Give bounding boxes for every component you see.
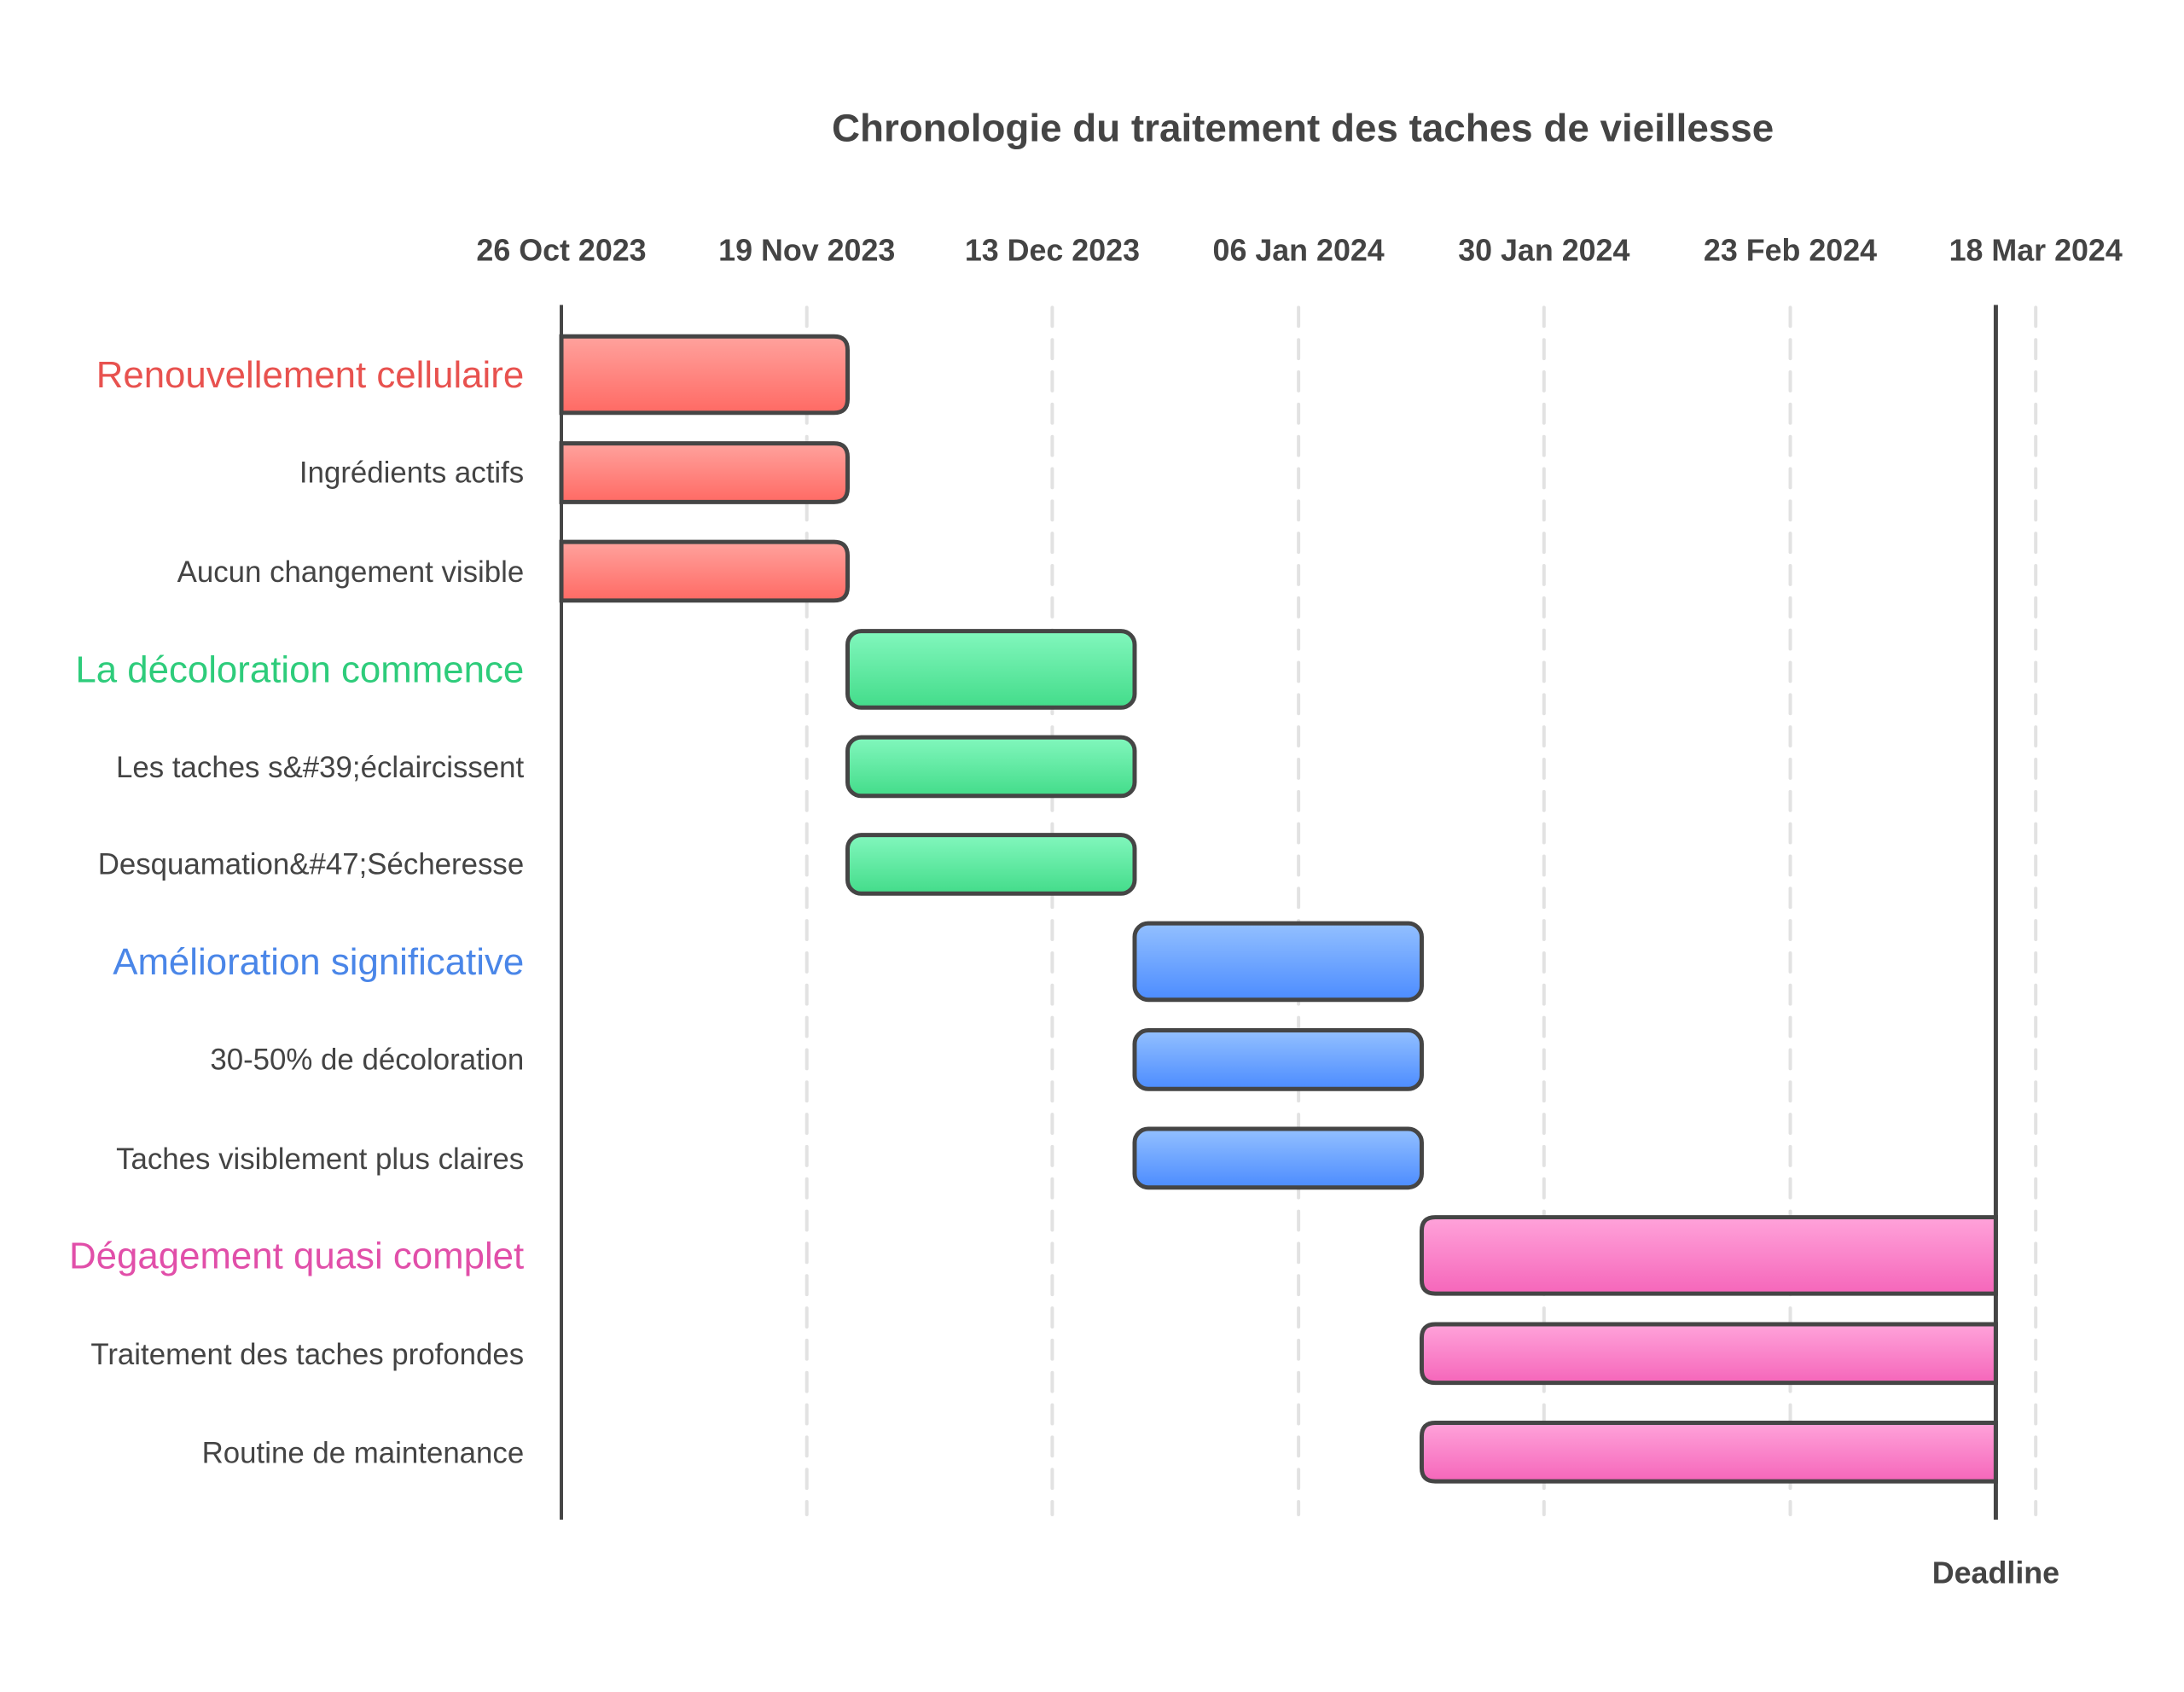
- row labels: Renouvellement cellulaire: [96, 354, 524, 396]
- axis date labels: [476, 234, 2123, 268]
- axis date labels: 06 Jan 2024: [1213, 234, 1385, 268]
- bar: Routine de maintenance: [1421, 1422, 1995, 1481]
- bar: 30-50%: [1135, 1031, 1421, 1089]
- bar: La décoloration commence: [848, 631, 1135, 707]
- row labels: Amélioration significative: [113, 941, 524, 983]
- axis date labels: 30 Jan 2024: [1458, 234, 1629, 268]
- start axis line: [560, 305, 563, 1520]
- bar: Les taches s'éclaircissent: [848, 737, 1135, 796]
- axis date labels: 18 Mar 2024: [1949, 234, 2123, 268]
- axis date labels: 26 Oct 2023: [476, 234, 647, 268]
- deadline line: [1994, 305, 1998, 1520]
- bar: Dégagement quasi complet: [1421, 1218, 1995, 1294]
- axis date labels: 23 Feb 2024: [1704, 234, 1877, 268]
- row labels: 30-50% de décoloration: [210, 1043, 524, 1076]
- bar: Traitement des taches profondes: [1421, 1324, 1995, 1383]
- bar: Ingrédients actifs: [561, 444, 848, 502]
- title: Chronologie du traitement des taches de vieillesse: [832, 106, 1774, 149]
- bar: Renouvellement cellulaire: [561, 336, 848, 413]
- axis date labels: 19 Nov 2023: [718, 234, 895, 268]
- row labels: Taches visiblement plus claires: [116, 1143, 524, 1176]
- row labels: Aucun changement visible: [177, 555, 524, 589]
- bars: [561, 336, 1995, 1481]
- row labels: Traitement des taches profondes: [90, 1338, 524, 1371]
- bar: Aucun changement visible: [561, 542, 848, 601]
- row labels: Desquamation&#47;Sécheresse: [98, 847, 524, 881]
- row labels: Routine de maintenance: [202, 1436, 524, 1469]
- bar: Amélioration significative: [1135, 923, 1421, 1000]
- row labels: Dégagement quasi complet: [69, 1235, 524, 1276]
- axis date labels: 13 Dec 2023: [965, 234, 1140, 268]
- row labels: Les taches s&#39;éclaircissent: [116, 751, 525, 784]
- row labels: Ingrédients actifs: [299, 456, 524, 489]
- deadline label: Deadline: [1932, 1556, 2059, 1590]
- bar: Desquamation: [848, 835, 1135, 893]
- bar: Taches visiblement plus claires: [1135, 1129, 1421, 1188]
- row labels: La décoloration commence: [75, 648, 524, 690]
- row labels: [69, 354, 525, 1469]
